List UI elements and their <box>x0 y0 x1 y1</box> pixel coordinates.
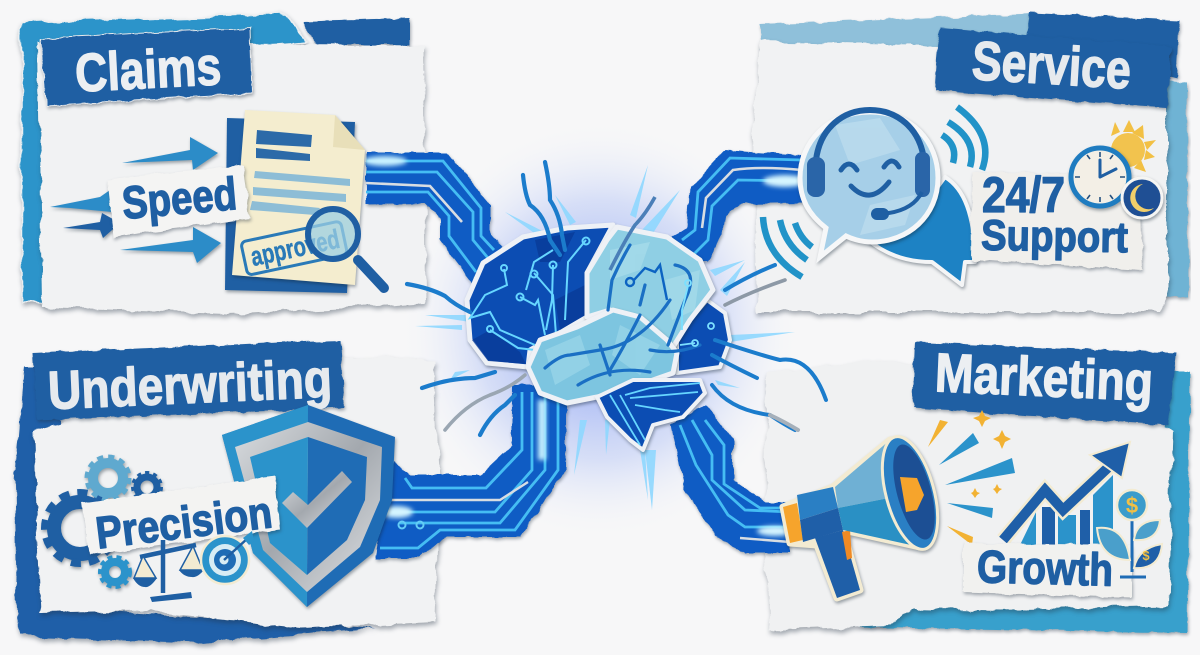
brain lower light lobe <box>528 310 677 403</box>
circuit band: underwriting to brain <box>375 385 566 558</box>
service dark blue backing <box>1025 13 1180 78</box>
loose wires: top <box>523 162 565 255</box>
upper lobe facets <box>610 242 700 320</box>
handle <box>815 530 860 598</box>
banner shape <box>33 340 345 420</box>
speed label <box>107 165 250 237</box>
document fold <box>333 115 365 150</box>
blue rays <box>939 433 1015 518</box>
ear cups <box>807 152 930 197</box>
loose wire: silver right <box>725 280 785 305</box>
body lower <box>800 508 843 542</box>
sun rays <box>1111 120 1156 172</box>
icon: moon <box>1122 178 1162 218</box>
smile face <box>841 161 899 195</box>
label paper <box>82 476 280 555</box>
dollar coin <box>1117 490 1147 520</box>
sound burst rays <box>928 410 1015 545</box>
microphone head <box>871 208 889 220</box>
illustration: approved document <box>225 110 365 293</box>
speed arrows <box>50 137 221 263</box>
dark leaf <box>1134 544 1162 568</box>
icon: smiling headset bubble <box>800 110 938 257</box>
body upper <box>797 487 838 520</box>
yellow rays <box>928 420 973 545</box>
panel: underwriting <box>15 358 440 642</box>
central glow <box>395 115 805 545</box>
icon: magnifying glass <box>308 209 384 288</box>
text: Speed: Speed <box>120 167 239 229</box>
dollar sign: $ <box>1126 493 1138 518</box>
band traces <box>680 420 790 527</box>
target centre <box>220 556 228 564</box>
upper lobe circuits <box>626 265 667 300</box>
marketing blue backing <box>857 372 1190 633</box>
band traces <box>682 158 802 254</box>
loose wires: right <box>712 265 826 430</box>
left lobe dark facets <box>472 232 585 364</box>
growth chart <box>1003 442 1130 545</box>
approved stamp <box>241 221 348 275</box>
icon: megaphone <box>783 431 948 598</box>
document backing <box>225 118 355 293</box>
plant stem <box>1120 520 1146 577</box>
speaker <box>900 477 924 512</box>
cone upper <box>835 440 904 508</box>
band traces <box>366 161 494 272</box>
band silver tear <box>702 168 802 228</box>
band glow <box>763 175 807 187</box>
banner shape <box>40 28 252 106</box>
bubble creases <box>835 118 915 235</box>
band silver tear <box>740 538 790 542</box>
small dollar sign: $ <box>1142 548 1150 563</box>
circuit nodes <box>398 522 424 528</box>
check mark <box>282 471 352 528</box>
back cap <box>783 503 803 543</box>
mouth rim <box>872 431 948 555</box>
document sheet <box>232 110 365 285</box>
mouth inner <box>885 440 943 544</box>
icon: sun <box>1111 120 1156 172</box>
shield inner left <box>250 437 308 575</box>
shield inner right <box>307 437 367 575</box>
scale base <box>150 592 192 602</box>
vertical glow <box>538 400 546 460</box>
headband <box>816 110 924 160</box>
shield outer <box>222 405 395 607</box>
marketing title banner <box>912 341 1177 425</box>
band shape <box>670 405 790 553</box>
label paper <box>963 543 1132 598</box>
document text strips <box>250 171 350 215</box>
text: Support: Support <box>981 212 1128 262</box>
brain left lobe circuits <box>470 238 590 350</box>
rising arrow fill <box>1003 462 1114 540</box>
cerebellum circuits <box>610 383 700 445</box>
band glow <box>381 506 413 518</box>
service light blue backing <box>760 14 1035 50</box>
circuit band: service to brain <box>672 150 807 262</box>
document heading strips <box>256 130 312 161</box>
loose wire: silver lower left <box>445 375 525 430</box>
claims white paper <box>38 42 426 314</box>
marketing white paper <box>763 362 1173 630</box>
band traces <box>380 392 558 548</box>
dark chart bars <box>1042 507 1090 545</box>
underwriting dark blue backing <box>15 365 375 642</box>
claims dark blue backing <box>302 18 410 45</box>
clock hands <box>1100 160 1116 177</box>
target arrow <box>224 538 248 560</box>
target rings <box>209 544 241 576</box>
icon: target with arrow <box>201 531 254 584</box>
service title banner <box>935 28 1172 108</box>
lower lobe facets <box>545 325 660 385</box>
arrow fletching <box>243 531 254 545</box>
heading: Service: Service <box>970 29 1133 101</box>
plant leaves <box>1097 520 1160 560</box>
claims light blue backing <box>22 14 310 305</box>
label paper <box>107 165 250 237</box>
cream outline <box>783 440 925 598</box>
loose wire: silver top <box>610 197 655 270</box>
panel: marketing <box>763 362 1190 633</box>
trigger <box>842 530 852 560</box>
icon: money plant <box>1097 490 1162 577</box>
large gear <box>45 493 115 563</box>
brain <box>407 162 826 450</box>
arrow head <box>1090 442 1130 478</box>
band glow <box>363 156 407 166</box>
brain left dark lobe <box>467 225 613 367</box>
gold stars <box>971 410 1011 498</box>
bubble <box>800 112 938 257</box>
upper gear <box>87 457 129 499</box>
band shape <box>672 150 802 262</box>
shield silver rim <box>235 422 382 592</box>
panel: claims <box>22 14 426 314</box>
loose wires: left <box>407 284 515 435</box>
support label <box>971 167 1143 270</box>
lower gear <box>100 557 130 587</box>
scale post and beam <box>140 540 196 593</box>
icon: lower signal arcs <box>763 217 812 277</box>
dark small gear <box>133 473 161 501</box>
icon: clock <box>1071 148 1129 206</box>
band glow <box>757 526 793 536</box>
brain cerebellum <box>597 380 705 450</box>
panel: service <box>753 13 1188 312</box>
icon: blue speech bubble <box>868 177 975 285</box>
service right light blue strip <box>1160 80 1188 297</box>
text: Precision: Precision <box>93 486 275 559</box>
light rays around brain <box>415 165 795 510</box>
loose wire: silver lower right <box>770 415 798 430</box>
text: 24/7: 24/7 <box>982 167 1065 223</box>
brain upper light lobe <box>587 227 713 347</box>
approved stamp: approved <box>248 224 342 272</box>
underwriting title banner <box>33 340 345 421</box>
shield outer left shade <box>222 405 308 607</box>
band silver tear <box>366 183 462 222</box>
circuit band: claims to brain <box>363 152 502 282</box>
growth label <box>963 540 1132 598</box>
claims title banner <box>40 28 252 106</box>
label paper <box>971 172 1143 270</box>
brain blue wires on light lobes <box>545 245 700 385</box>
circuit band: marketing to brain <box>670 405 793 553</box>
rising arrow outline <box>1003 462 1114 540</box>
underwriting white paper <box>33 358 440 628</box>
text: Growth: Growth <box>976 540 1114 596</box>
icon: balance scale <box>133 540 204 602</box>
icon: gears <box>45 457 161 587</box>
icon: shield with check <box>222 405 395 607</box>
microphone <box>880 192 922 214</box>
band shape <box>366 152 502 282</box>
crescent <box>1130 184 1154 212</box>
brain right dark lobe <box>677 300 730 373</box>
heading: Marketing: Marketing <box>934 341 1154 413</box>
band shape <box>375 385 566 558</box>
banner shape <box>935 28 1172 108</box>
clock ticks <box>1075 152 1125 202</box>
right lobe circuits <box>680 280 714 346</box>
service white paper <box>753 42 1168 312</box>
icon: upper signal arcs <box>942 107 985 170</box>
banner shape <box>912 342 1177 425</box>
precision label <box>82 476 280 559</box>
cone lower <box>838 495 920 547</box>
heading: Underwriting: Underwriting <box>47 349 333 421</box>
scale pans <box>134 546 203 578</box>
band silver tear <box>388 482 528 500</box>
scale pan fills <box>133 570 204 587</box>
sun disc <box>1111 133 1145 167</box>
chart bars <box>1020 475 1113 545</box>
heading: Claims: Claims <box>74 36 223 104</box>
